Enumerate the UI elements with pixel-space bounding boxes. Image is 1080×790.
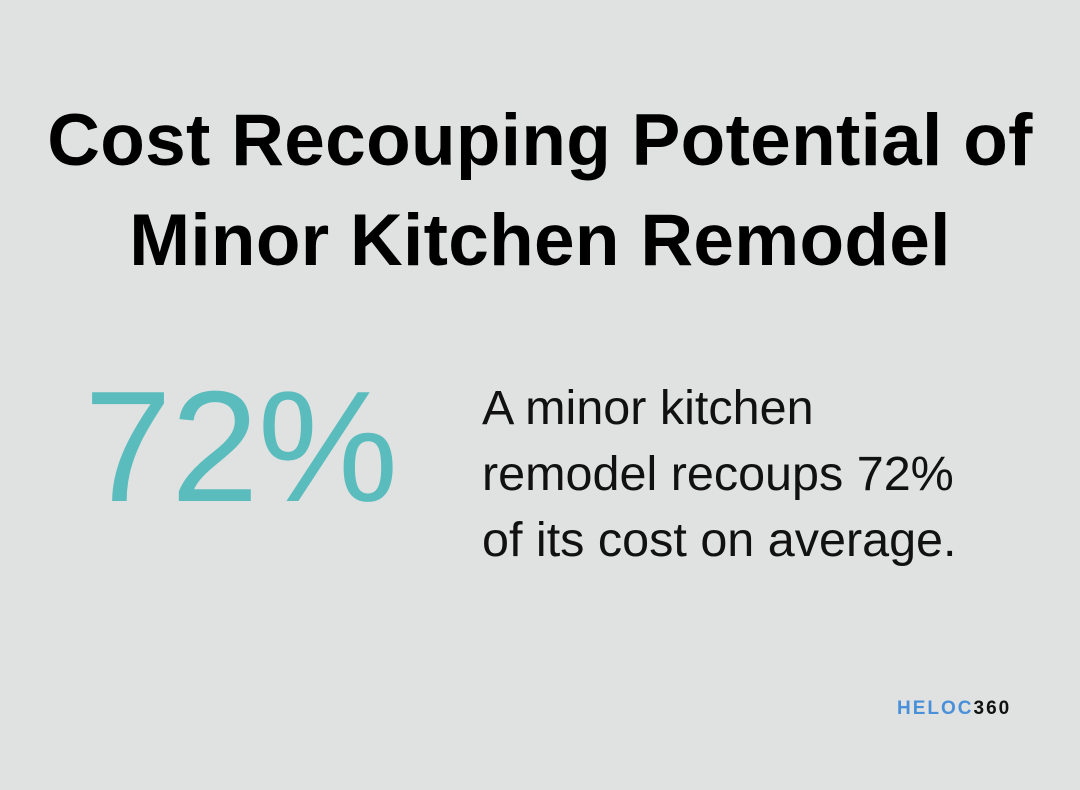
logo: HELOC360	[897, 698, 1011, 719]
description: of its cost on average.	[482, 513, 956, 567]
description	[482, 381, 956, 567]
title	[47, 100, 1033, 281]
description: A minor kitchen	[482, 381, 814, 435]
description: remodel recoups 72%	[482, 447, 954, 501]
big stat: 72%	[84, 359, 397, 535]
title: Minor Kitchen Remodel	[129, 200, 951, 281]
title: Cost Recouping Potential of	[47, 100, 1033, 181]
